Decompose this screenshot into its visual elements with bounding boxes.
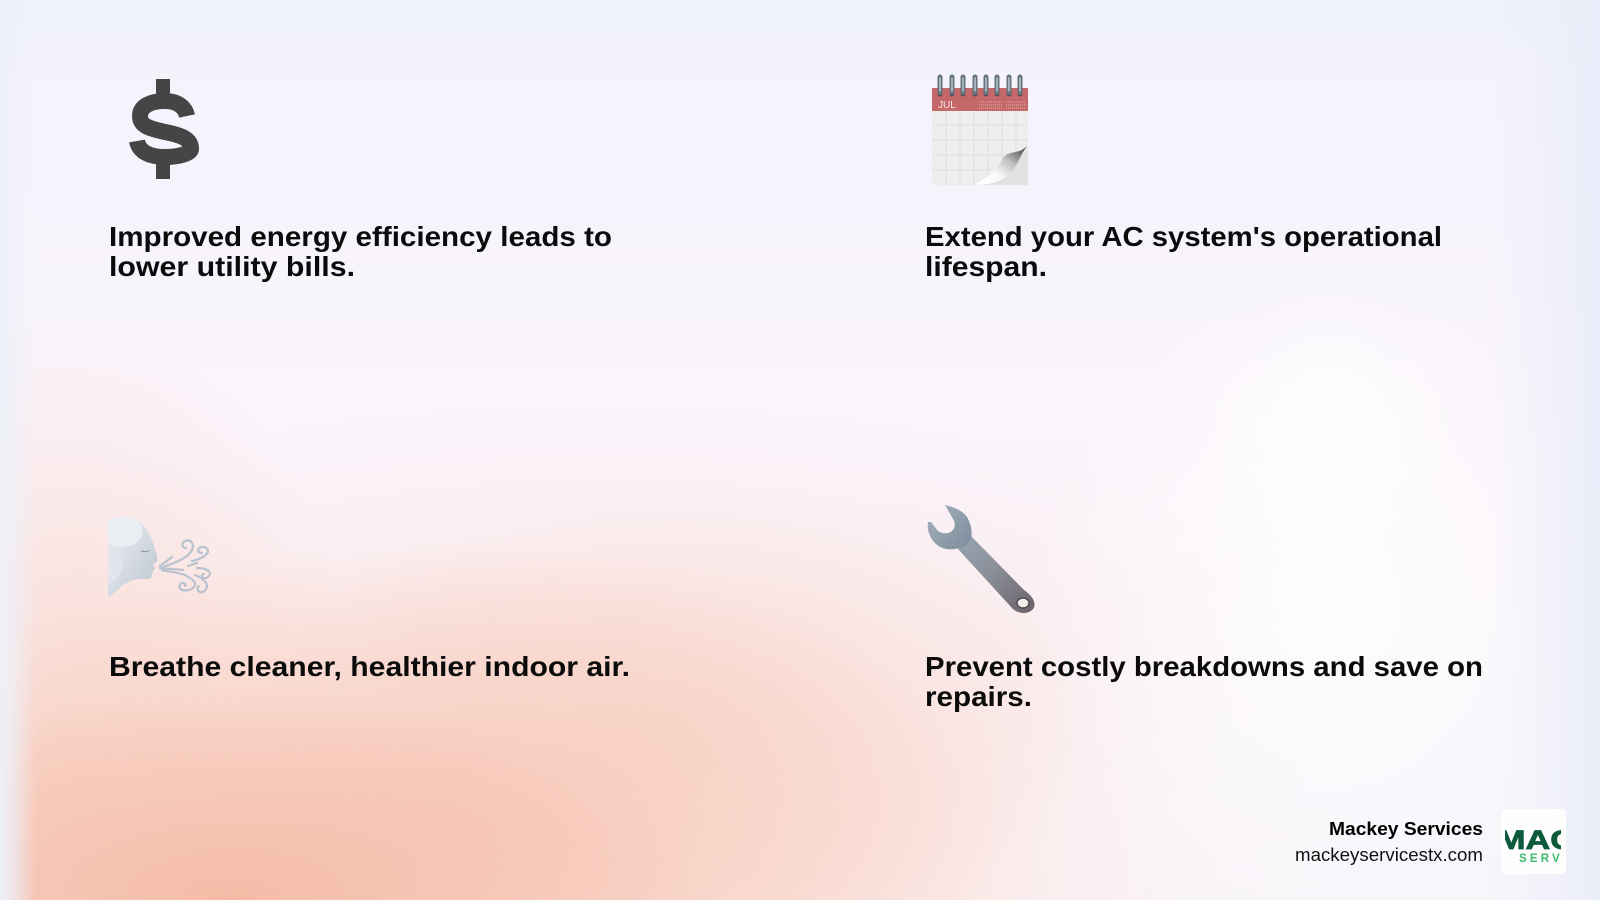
icon: wind face [108, 517, 210, 598]
logo [1501, 809, 1566, 874]
panel: lifespan [925, 77, 1442, 282]
panel: indoor air [108, 517, 630, 682]
panel: repairs [925, 505, 1483, 712]
icon: dollar sign [137, 79, 191, 179]
icon: calendar [932, 77, 1028, 185]
logo: SERV [1519, 853, 1563, 865]
footer brand [1295, 809, 1575, 874]
logo: MAC [1497, 825, 1575, 855]
text: lifespan: Extend your AC system's operational [925, 221, 1442, 252]
panel: energy efficiency [109, 79, 612, 282]
text: lifespan: lifespan. [925, 251, 1047, 282]
website url: mackeyservicestx.com [1295, 845, 1483, 865]
brand name: Mackey Services [1329, 819, 1483, 839]
text: energy efficiency: Improved energy efficiency leads to [109, 221, 612, 252]
text: indoor air: Breathe cleaner, healthier indoor air. [109, 651, 630, 682]
text: repairs: repairs. [925, 681, 1032, 712]
icon: wrench [928, 505, 1035, 613]
text: repairs: Prevent costly breakdowns and save on [925, 651, 1483, 682]
icon: calendar: JUL [938, 100, 956, 111]
text: energy efficiency: lower utility bills. [109, 251, 355, 282]
